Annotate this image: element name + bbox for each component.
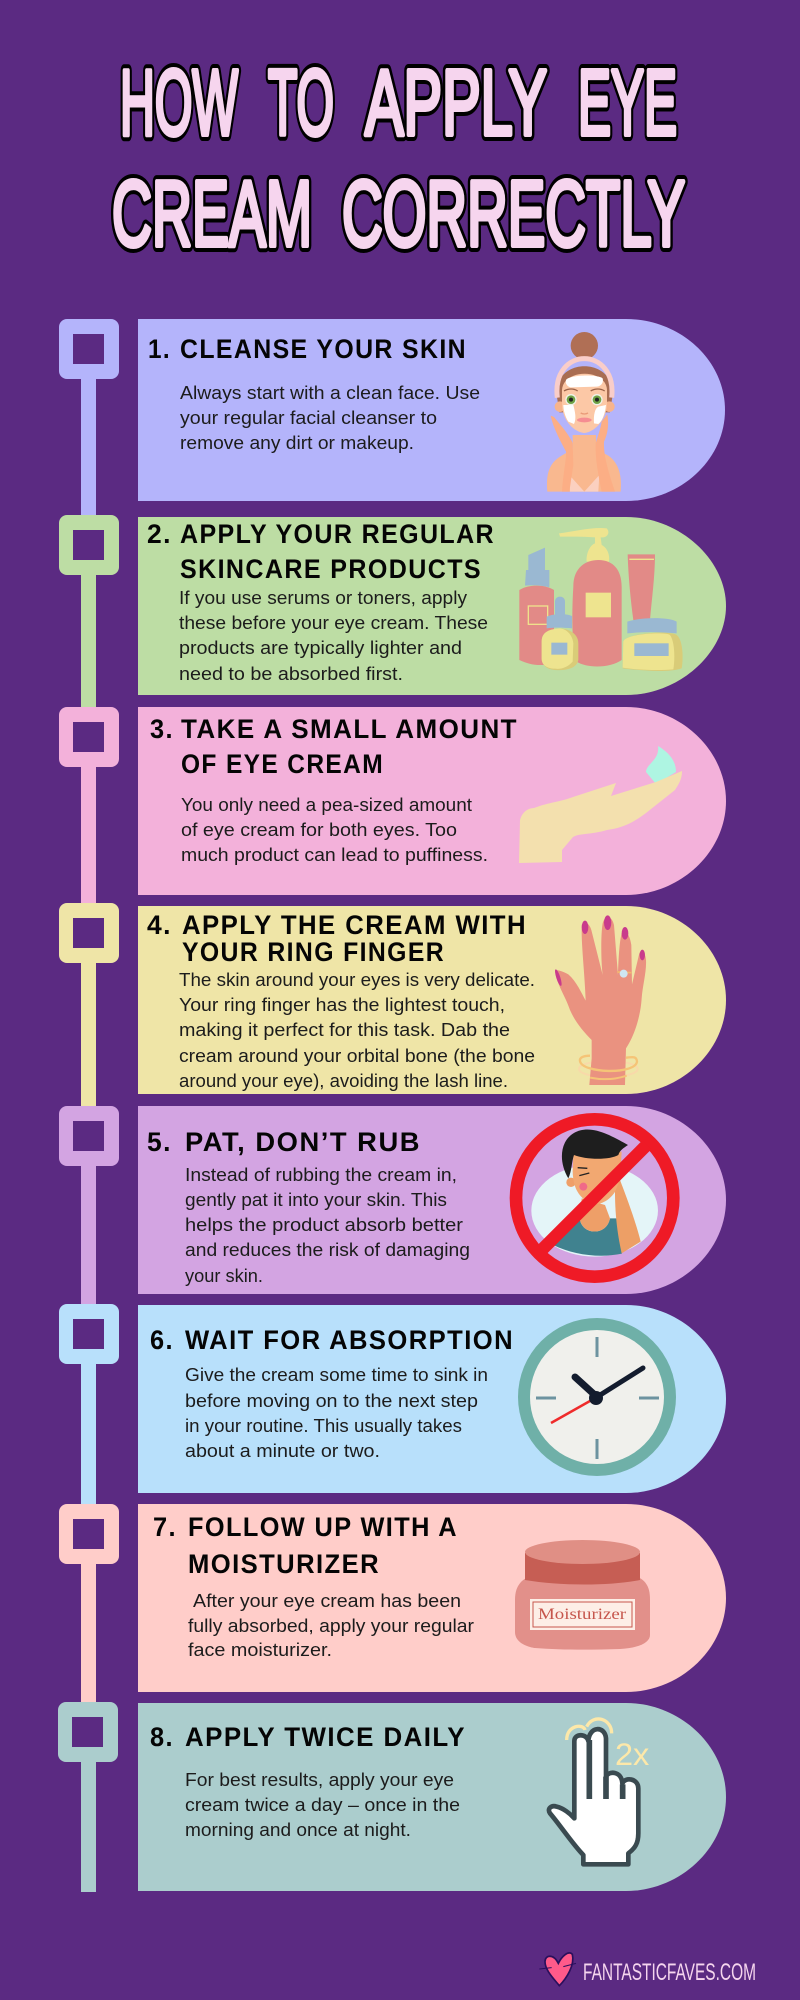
heading: MOISTURIZER [188, 1549, 380, 1579]
icon: heart logo [539, 1953, 576, 1986]
body text: much product can lead to puffiness. [181, 845, 488, 865]
body text: If you use serums or toners, apply [179, 588, 467, 608]
heading: 8. [150, 1722, 174, 1752]
title [112, 50, 685, 266]
card background [138, 707, 726, 895]
card background [138, 1703, 726, 1891]
body text: Your ring finger has the lightest touch, [179, 995, 505, 1015]
body text: products are typically lighter and [179, 638, 462, 658]
body text: these before your eye cream. These [179, 613, 488, 633]
card background [138, 906, 726, 1094]
timeline marker 4 [59, 903, 119, 1108]
timeline marker 5 [59, 1106, 119, 1306]
body text: making it perfect for this task. Dab the [179, 1020, 510, 1040]
heading [147, 519, 495, 584]
heading: 5. [147, 1127, 172, 1157]
body text: your regular facial cleanser to [180, 408, 437, 428]
footer brand [539, 1953, 756, 1986]
heading: 1. [148, 334, 171, 364]
card background [138, 319, 725, 501]
heading [153, 1512, 458, 1579]
heading: APPLY YOUR REGULAR [180, 519, 495, 549]
body text: Give the cream some time to sink in [185, 1365, 488, 1385]
body text: before moving on to the next step [185, 1391, 478, 1411]
body text: around your eye), avoiding the lash line. [179, 1071, 508, 1091]
body text [185, 1770, 460, 1840]
timeline marker 7 [59, 1504, 119, 1704]
panel: step 8 twice daily [138, 1703, 726, 1891]
body text: morning and once at night. [185, 1820, 411, 1840]
icon: moisturizer jar: Moisturizer [538, 1606, 627, 1623]
body text [185, 1165, 470, 1286]
heading: CLEANSE YOUR SKIN [180, 334, 467, 364]
body text: Always start with a clean face. Use [180, 383, 480, 403]
title: EYE [578, 50, 677, 154]
body text [180, 383, 480, 453]
body text: remove any dirt or makeup. [180, 433, 414, 453]
title: APPLY [365, 50, 547, 154]
body text: in your routine. This usually takes [185, 1416, 462, 1436]
heading: 4. [147, 910, 172, 940]
card background [138, 1305, 726, 1493]
body text: of eye cream for both eyes. Too [181, 820, 457, 840]
panel: step 6 wait [138, 1305, 726, 1493]
body text: fully absorbed, apply your regular [188, 1616, 474, 1636]
body text: face moisturizer. [188, 1640, 332, 1660]
heading [150, 714, 518, 779]
body text [179, 970, 535, 1091]
body text: about a minute or two. [185, 1441, 380, 1461]
panel: step 7 moisturizer [138, 1504, 726, 1692]
panel: step 2 skincare products [138, 517, 726, 695]
card background [138, 1106, 726, 1294]
body text: You only need a pea-sized amount [181, 795, 472, 815]
panel: step 4 ring finger [138, 906, 726, 1094]
panel: step 1 cleanse [138, 319, 725, 501]
body text: After your eye cream has been [193, 1591, 461, 1611]
heading [147, 910, 527, 967]
timeline marker 6 [59, 1304, 119, 1506]
card background [138, 1504, 726, 1692]
title: APPLY [365, 50, 547, 154]
panel: step 5 pat don't rub [138, 1106, 726, 1294]
title: TO [268, 50, 334, 154]
heading: APPLY TWICE DAILY [185, 1722, 466, 1752]
title: CREAM [112, 162, 312, 266]
icon: hand with ring [554, 915, 646, 1085]
body text: For best results, apply your eye [185, 1770, 454, 1790]
body text: your skin. [185, 1266, 263, 1286]
timeline marker 1 [59, 319, 119, 520]
heading: 2. [147, 519, 172, 549]
title: CREAM [112, 162, 312, 266]
heading: FOLLOW UP WITH A [188, 1512, 458, 1542]
title: HOW [120, 50, 238, 154]
timeline marker 3 [59, 707, 119, 906]
body text: and reduces the risk of damaging [185, 1240, 470, 1260]
title: HOW [120, 50, 238, 154]
heading: OF EYE CREAM [181, 749, 384, 779]
heading: WAIT FOR ABSORPTION [185, 1325, 514, 1355]
panel: step 3 small amount [138, 707, 726, 895]
body text: cream around your orbital bone (the bone [179, 1046, 535, 1066]
title: EYE [578, 50, 677, 154]
heading: PAT, DON’T RUB [185, 1127, 421, 1157]
body text [179, 588, 488, 684]
body text [181, 795, 488, 865]
heading: TAKE A SMALL AMOUNT [181, 714, 518, 744]
body text: Instead of rubbing the cream in, [185, 1165, 457, 1185]
body text: helps the product absorb better [185, 1215, 463, 1235]
heading: YOUR RING FINGER [182, 937, 445, 967]
icon: clock [518, 1318, 676, 1476]
heading: 3. [150, 714, 174, 744]
icon: hand with cream [519, 746, 682, 863]
timeline marker 8 [58, 1702, 118, 1892]
heading: SKINCARE PRODUCTS [180, 554, 482, 584]
icon: woman with cleanser [547, 332, 621, 492]
card background [138, 517, 726, 695]
icon: two finger hand: 2x [615, 1736, 649, 1772]
heading: APPLY THE CREAM WITH [182, 910, 527, 940]
body text: The skin around your eyes is very delicate. [179, 970, 535, 990]
body text [188, 1591, 474, 1660]
timeline marker 2 [59, 515, 119, 710]
icon: two finger hand [549, 1719, 649, 1864]
title: TO [268, 50, 334, 154]
icon: skincare bottles [519, 528, 683, 671]
icon: no rubbing sign [516, 1119, 673, 1277]
icon: moisturizer jar [515, 1540, 650, 1650]
body text [185, 1365, 488, 1461]
body text: gently pat it into your skin. This [185, 1190, 447, 1210]
heading: 7. [153, 1512, 177, 1542]
heading: 6. [150, 1325, 174, 1355]
body text: need to be absorbed first. [179, 664, 403, 684]
body text: cream twice a day – once in the [185, 1795, 460, 1815]
